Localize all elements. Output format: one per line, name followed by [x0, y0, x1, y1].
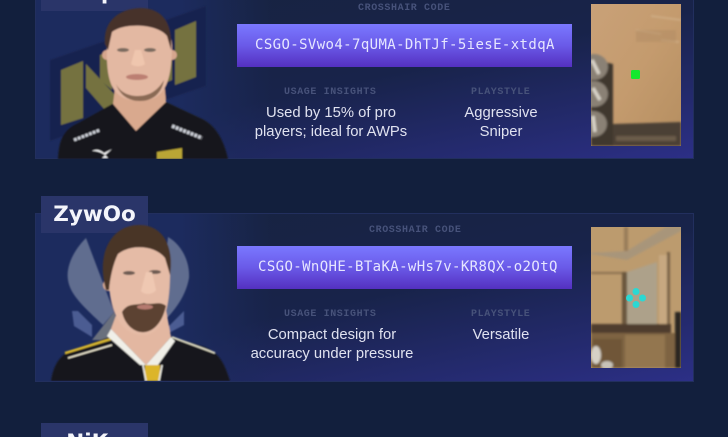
usage insights text: accuracy under pressure — [251, 346, 413, 362]
label: usage insights: USAGE INSIGHTS — [284, 309, 376, 320]
panel: ZywOo card — [35, 213, 694, 382]
playstyle text: Versatile — [473, 327, 529, 343]
portrait: first player with NAVI logo — [50, 7, 228, 159]
crosshair: green dot — [631, 70, 640, 79]
playstyle text: Aggressive — [464, 105, 538, 121]
panel: s1mple card — [35, 0, 694, 159]
label: usage insights: USAGE INSIGHTS — [284, 87, 376, 98]
crosshair code button — [237, 246, 572, 289]
crosshair code button: CSGO-SVwo4-7qUMA-DhTJf-5iesE-xtdqA — [255, 37, 555, 53]
label: crosshair code: CROSSHAIR CODE — [369, 225, 461, 236]
crosshair code button: CSGO-WnQHE-BTaKA-wHs7v-KR8QX-o2OtQ — [258, 259, 558, 275]
name tag: first player — [41, 0, 148, 11]
label: playstyle: PLAYSTYLE — [471, 87, 530, 98]
crosshair code button — [237, 24, 572, 67]
usage insights text — [251, 327, 413, 362]
playstyle text — [464, 105, 538, 140]
usage insights text: Compact design for — [268, 327, 396, 343]
label: playstyle: PLAYSTYLE — [471, 309, 530, 320]
name tag: ZywOo: ZywOo — [53, 202, 136, 227]
usage insights text — [255, 105, 407, 140]
crosshair: cyan cross — [626, 288, 646, 308]
portrait: ZywOo with Vitality logo — [50, 224, 230, 381]
usage insights text: players; ideal for AWPs — [255, 124, 407, 140]
label: crosshair code: CROSSHAIR CODE — [358, 3, 450, 14]
crosshair preview: cyan cross on interior wall — [591, 227, 681, 368]
name tag: ZywOo — [41, 196, 148, 233]
name tag: NiKo — [41, 423, 148, 437]
playstyle text: Sniper — [480, 124, 522, 140]
usage insights text: Used by 15% of pro — [266, 105, 396, 121]
crosshair preview: green dot on sand wall — [591, 4, 681, 146]
